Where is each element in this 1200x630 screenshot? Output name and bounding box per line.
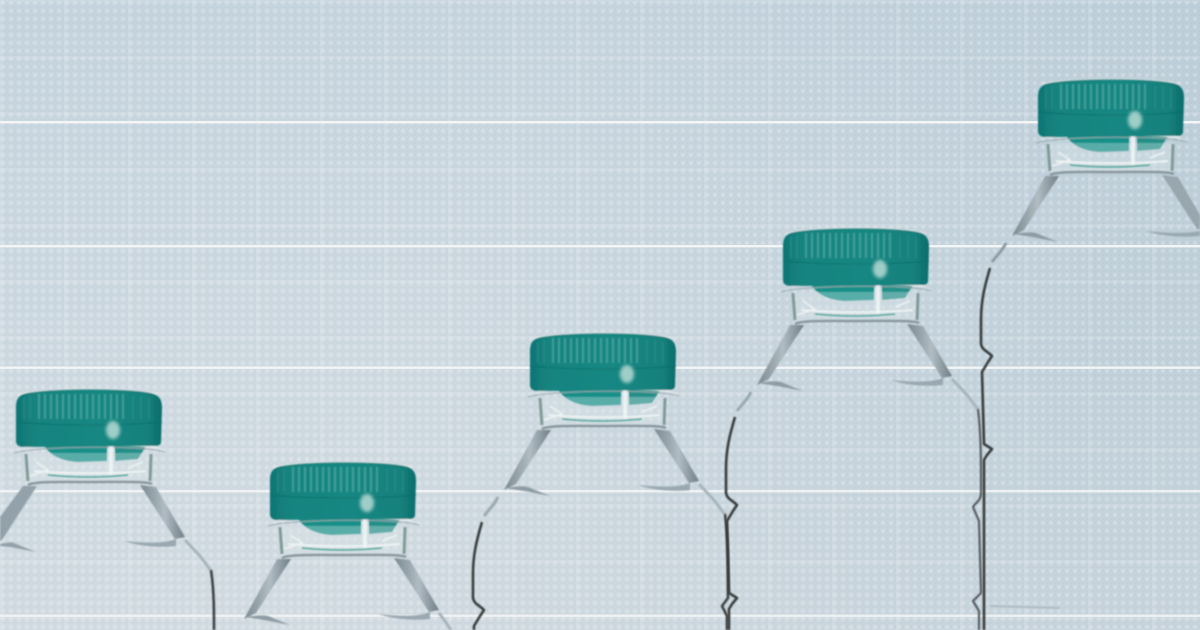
bottle 5 glass body xyxy=(981,175,1200,630)
bottle 3 neck xyxy=(528,386,679,429)
bottle 5 xyxy=(981,79,1200,630)
bottle 2 xyxy=(244,462,451,630)
bottle 3 cap xyxy=(530,333,676,391)
chart grid lines xyxy=(0,121,1200,617)
bottle 1 cap xyxy=(16,389,162,447)
bottle 2 shoulders xyxy=(244,558,451,630)
bottle 4 glass body xyxy=(726,324,981,630)
bottle 4 neck xyxy=(781,281,932,324)
bottle 2 cap xyxy=(270,462,416,520)
bottle 2 neck xyxy=(268,515,419,558)
bottle 1 left shoulder xyxy=(0,486,37,552)
bottle 3 xyxy=(473,333,728,630)
bottle 1 right side xyxy=(124,485,214,630)
bottle 4 xyxy=(726,228,981,630)
bottle 3 glass body xyxy=(473,429,728,630)
bottle 4 cap xyxy=(783,228,929,286)
bottle 1 xyxy=(0,389,214,630)
bottle 5 neck xyxy=(1036,132,1187,175)
bottle 1 neck xyxy=(14,442,165,485)
bottle 5 cap xyxy=(1038,79,1184,137)
